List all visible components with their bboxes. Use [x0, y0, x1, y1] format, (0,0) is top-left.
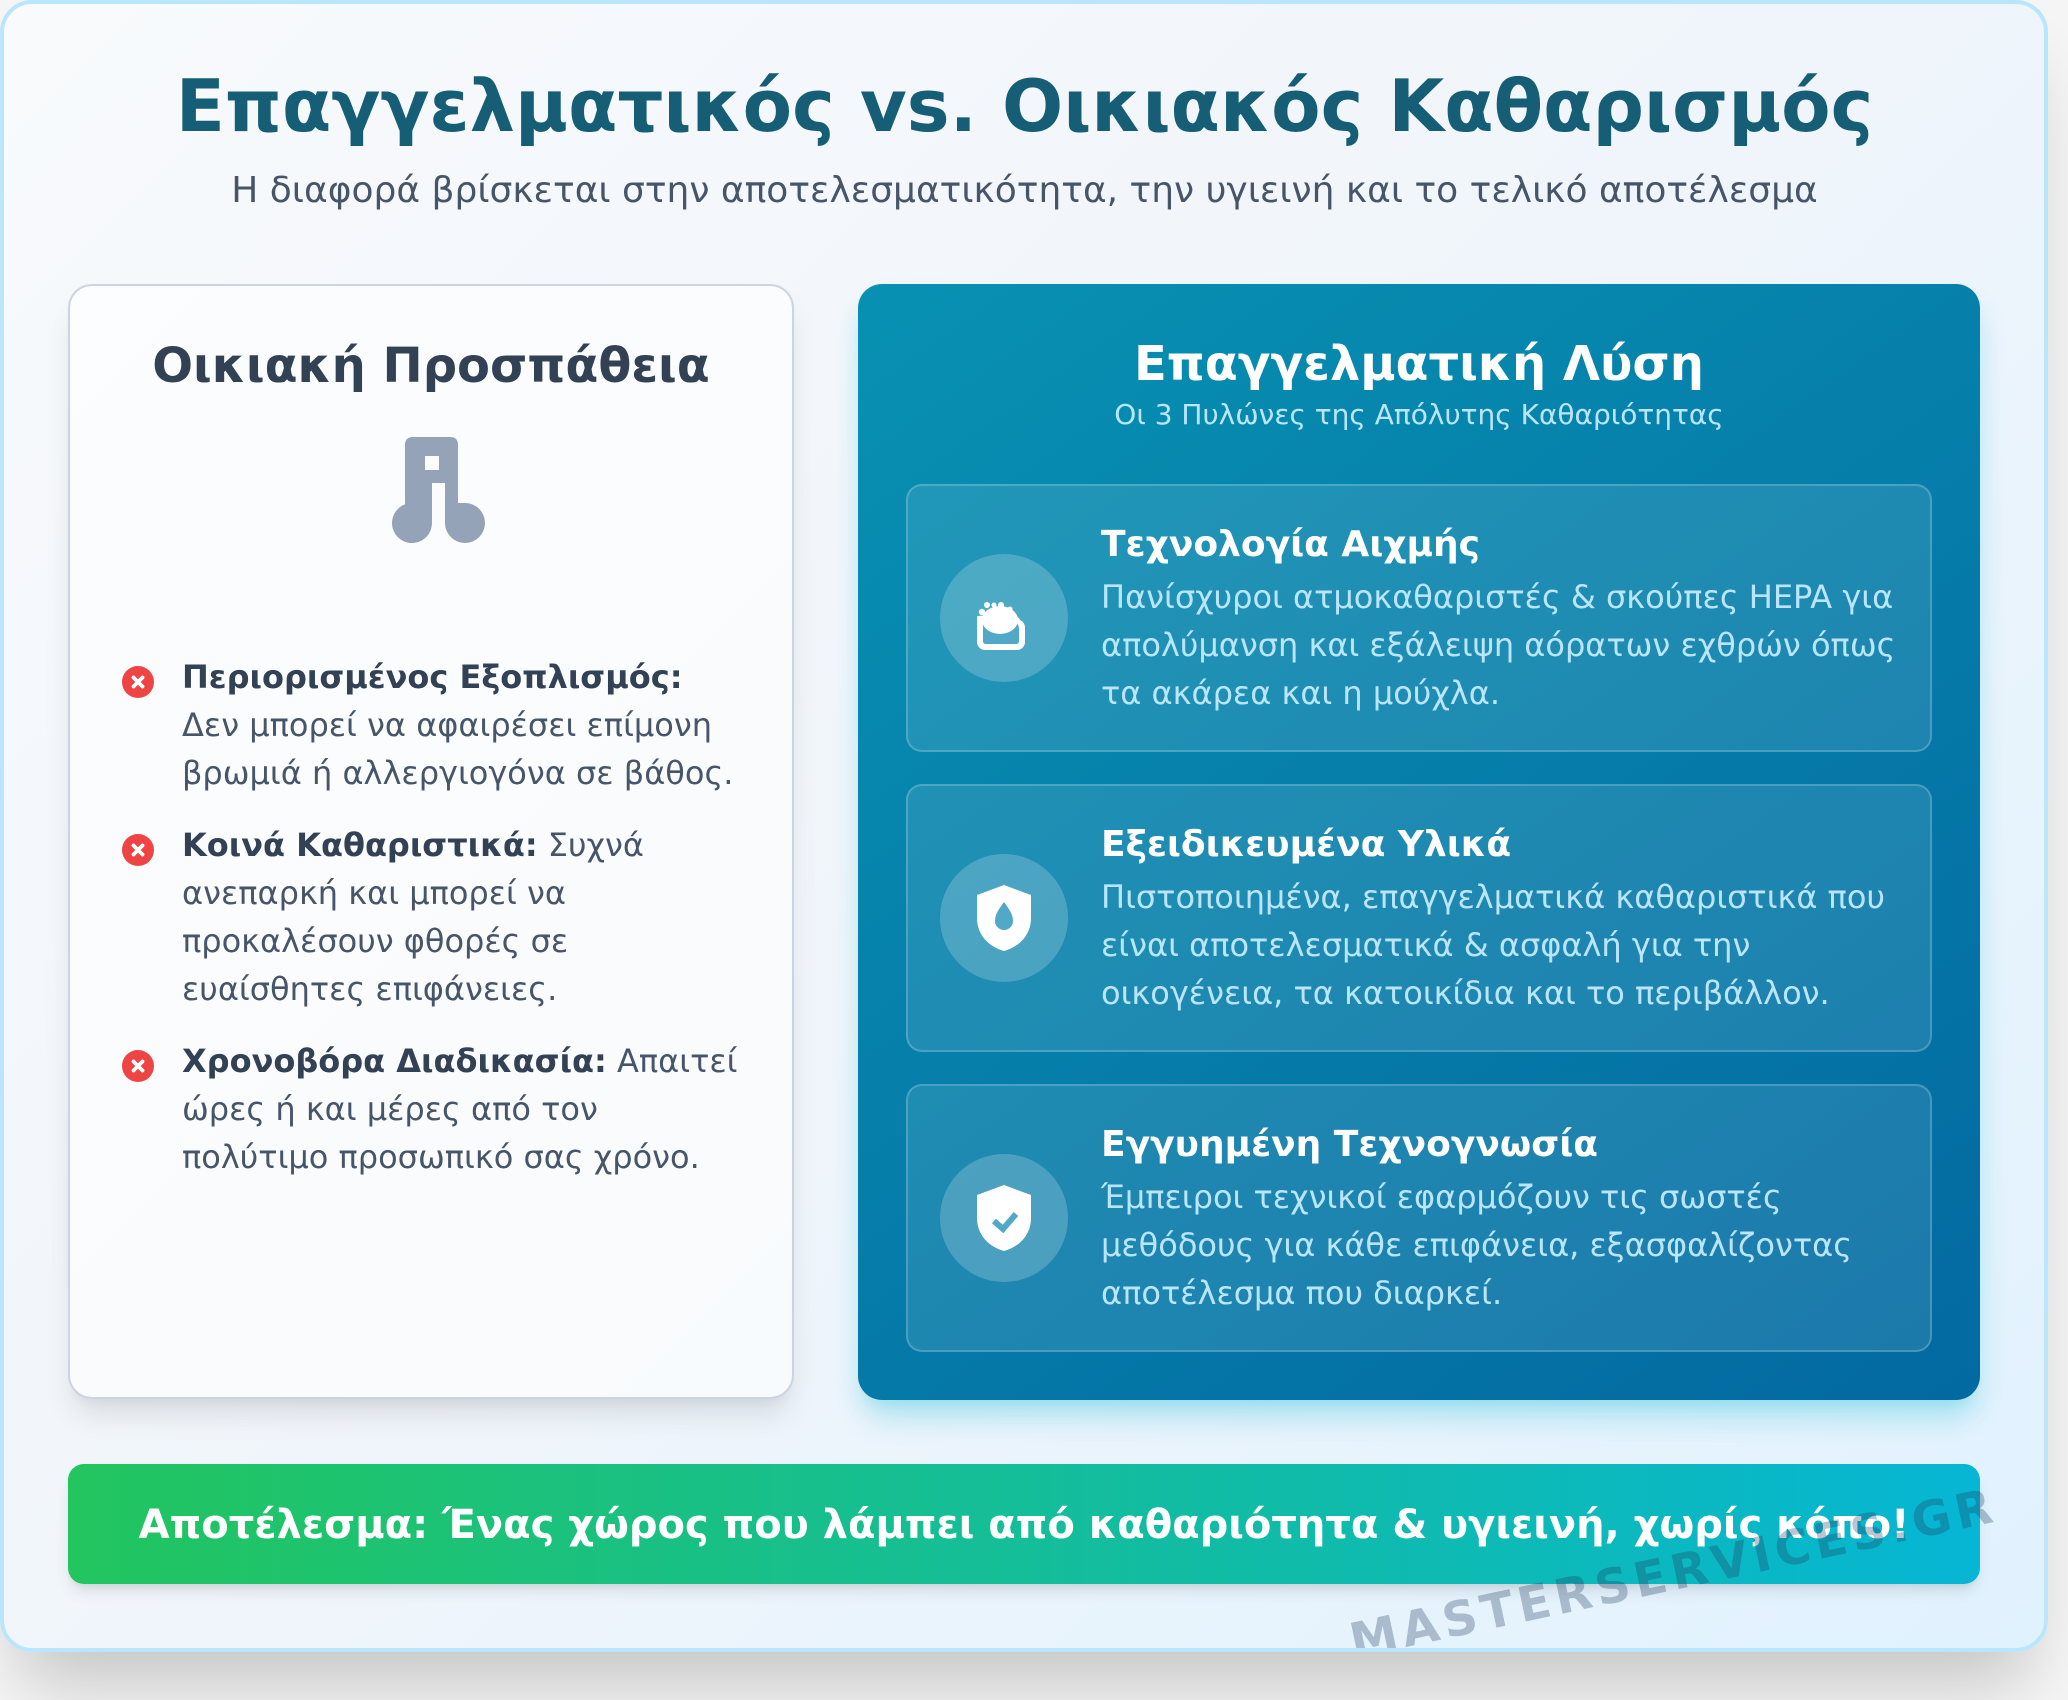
limitation 1 text: βρωμιά ή αλλεργιογόνα σε βάθος.	[182, 754, 733, 792]
card: materials	[906, 784, 1932, 1052]
result banner	[68, 1464, 1980, 1584]
icon: shield with check	[940, 1154, 1068, 1282]
subtitle: Η διαφορά βρίσκεται στην αποτελεσματικότητα, την υγιεινή και το τελικό αποτέλεσμα	[231, 170, 1818, 211]
materials description	[1101, 878, 1885, 1012]
professional subheading: Οι 3 Πυλώνες της Απόλυτης Καθαριότητας	[1114, 398, 1724, 431]
limitation 1 text	[182, 658, 733, 792]
limitation 2 text: Κοινά Καθαριστικά: Συχνά	[182, 826, 644, 864]
limitation 2 icon	[122, 834, 154, 866]
limitation 2 text: ευαίσθητες επιφάνειες.	[182, 970, 557, 1008]
expertise description	[1100, 1178, 1852, 1312]
icon: shield with drop	[940, 854, 1068, 982]
title: Επαγγελματικός vs. Οικιακός Καθαρισμός	[176, 64, 1873, 148]
panel: professional solution	[858, 284, 1980, 1400]
technology description	[1101, 578, 1895, 712]
limitation 3 text	[182, 1042, 737, 1176]
limitation 1 icon	[122, 666, 154, 698]
limitation 2 text: προκαλέσουν φθορές σε	[182, 922, 568, 960]
limitation 3 text: πολύτιμο προσωπικό σας χρόνο.	[182, 1138, 700, 1176]
home effort heading: Οικιακή Προσπάθεια	[152, 338, 710, 394]
limitation 1 text: Δεν μπορεί να αφαιρέσει επίμονη	[182, 706, 712, 744]
expertise title: Εγγυημένη Τεχνογνωσία	[1101, 1124, 1598, 1165]
technology title: Τεχνολογία Αιχμής	[1101, 524, 1480, 565]
limitation 1 text: Περιορισμένος Εξοπλισμός:	[182, 658, 682, 696]
limitation 3 text: Χρονοβόρα Διαδικασία: Απαιτεί	[182, 1042, 737, 1080]
limitation 3 icon	[122, 1050, 154, 1082]
limitation 3 text: ώρες ή και μέρες από τον	[182, 1090, 598, 1128]
technology description: τα ακάρεα και η μούχλα.	[1101, 674, 1500, 712]
expertise description: Έμπειροι τεχνικοί εφαρμόζουν τις σωστές	[1101, 1178, 1782, 1216]
materials title: Εξειδικευμένα Υλικά	[1101, 824, 1511, 865]
icon: spray bottle	[392, 437, 485, 543]
professional heading: Επαγγελματική Λύση	[1134, 336, 1704, 392]
card: technology	[906, 484, 1932, 752]
result banner: Αποτέλεσμα: Ένας χώρος που λάμπει από καθαριότητα & υγιεινή, χωρίς κόπο!	[139, 1502, 1909, 1548]
technology description: απολύμανση και εξάλειψη αόρατων εχθρών όπως	[1101, 626, 1895, 664]
expertise description: μεθόδους για κάθε επιφάνεια, εξασφαλίζοντας	[1101, 1226, 1852, 1264]
materials description: οικογένεια, τα κατοικίδια και το περιβάλλον.	[1101, 974, 1830, 1012]
limitation 2 text	[182, 826, 644, 1008]
icon: steam cleaner	[940, 554, 1068, 682]
materials description: Πιστοποιημένα, επαγγελματικά καθαριστικά που	[1101, 878, 1885, 916]
card: expertise	[906, 1084, 1932, 1352]
materials description: είναι αποτελεσματικά & ασφαλή για την	[1101, 926, 1750, 964]
technology description: Πανίσχυροι ατμοκαθαριστές & σκούπες HEPA για	[1101, 578, 1893, 616]
limitation 2 text: ανεπαρκή και μπορεί να	[182, 874, 566, 912]
panel: home effort	[68, 284, 794, 1399]
expertise description: αποτέλεσμα που διαρκεί.	[1101, 1274, 1502, 1312]
